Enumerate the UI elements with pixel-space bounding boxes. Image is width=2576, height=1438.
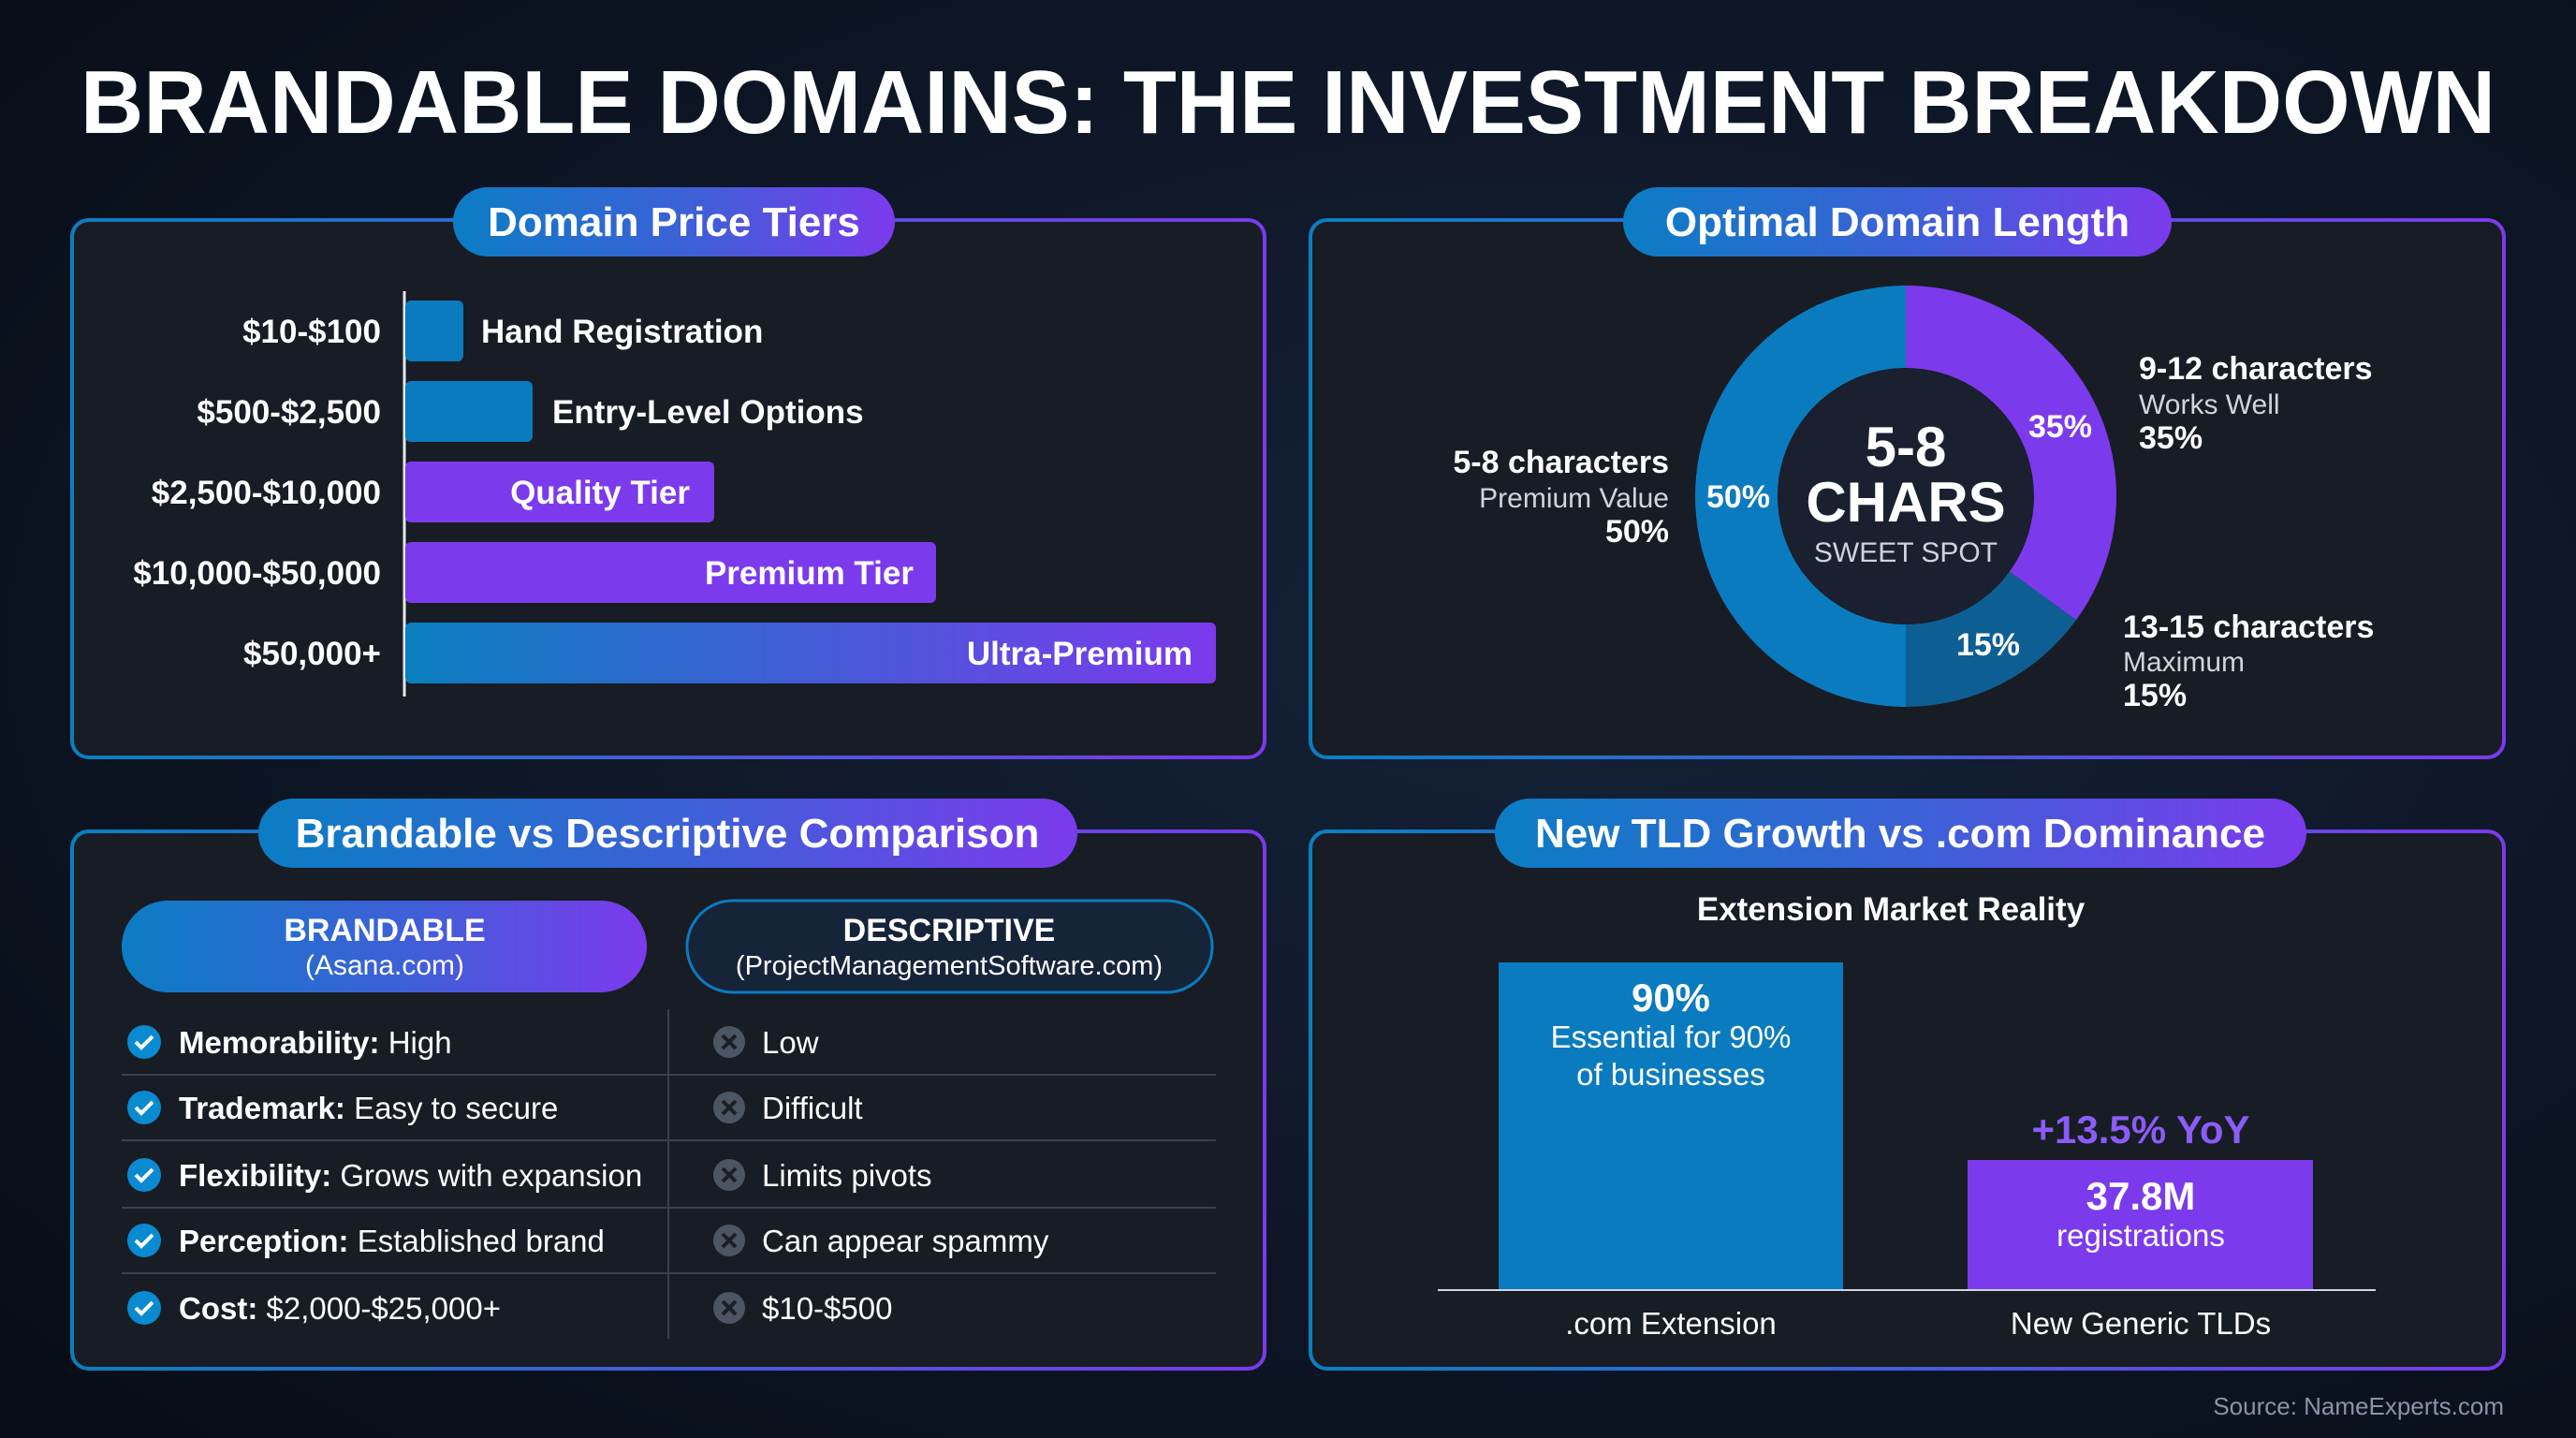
- brandable rows: Cost: $2,000-$25,000+: [179, 1291, 501, 1326]
- donut chart: SWEET SPOT: [1814, 537, 1998, 568]
- descriptive rows: $10-$500: [762, 1291, 892, 1326]
- donut chart: CHARS: [1806, 471, 2006, 534]
- heading: Domain Price Tiers: Domain Price Tiers: [488, 199, 860, 245]
- brandable rows: Perception: Established brand: [179, 1224, 605, 1258]
- chart subtitle: Extension Market Reality: [1697, 891, 2086, 928]
- legend: 13-15 characters: 15%: [2123, 678, 2187, 713]
- donut chart: [1695, 286, 2116, 707]
- axis labels: [1565, 1306, 2271, 1341]
- source: Source: NameExperts.com: [2213, 1392, 2504, 1420]
- bar chart: price tiers: Premium Tier: [705, 555, 914, 592]
- bar chart: price tiers: Ultra-Premium: [967, 636, 1193, 672]
- legend: 9-12 characters: 35%: [2139, 420, 2203, 456]
- bar: new gTLDs: [1968, 1160, 2313, 1290]
- heading: comparison: Brandable vs Descriptive Comparison: [296, 811, 1039, 857]
- axis labels: .com Extension: [1565, 1306, 1777, 1341]
- legend: 5-8 characters: [1453, 445, 1669, 550]
- brandable rows: [127, 1025, 642, 1326]
- legend: 5-8 characters: Premium Value: [1479, 483, 1669, 514]
- bar chart: price tiers: $10,000-$50,000: [133, 555, 381, 592]
- bar chart: price tiers: Entry-Level Options: [552, 394, 864, 431]
- column header: descriptive: [687, 901, 1212, 992]
- growth callout: +13.5% YoY: [2031, 1108, 2250, 1152]
- heading: Optimal Domain Length: [1623, 187, 2172, 257]
- descriptive rows: Can appear spammy: [762, 1224, 1049, 1258]
- heading: Optimal Domain Length: Optimal Domain Length: [1665, 199, 2130, 245]
- brandable rows: Trademark: Easy to secure: [179, 1091, 558, 1125]
- bar chart: price tiers: [133, 301, 1216, 683]
- heading: comparison: [258, 799, 1077, 868]
- column header: brandable: (Asana.com): [305, 950, 464, 981]
- heading: TLD growth: [1495, 799, 2306, 868]
- descriptive rows: Low: [762, 1025, 819, 1060]
- legend: 5-8 characters: 5-8 characters: [1453, 445, 1669, 480]
- panel: brandable vs descriptive: [72, 799, 1265, 1369]
- bar: .com: [1499, 962, 1843, 1290]
- legend: 13-15 characters: [2123, 609, 2374, 713]
- brandable rows: Flexibility: Grows with expansion: [179, 1158, 642, 1193]
- bar chart: price tiers: $10-$100: [242, 314, 381, 350]
- title: BRANDABLE DOMAINS: THE INVESTMENT BREAKDOWN: [80, 52, 2496, 153]
- axis labels: New Generic TLDs: [2011, 1306, 2271, 1341]
- brandable rows: Memorability: High: [179, 1025, 452, 1060]
- bar chart: price tiers: $50,000+: [243, 636, 381, 672]
- bar: .com: 90%: [1632, 976, 1710, 1020]
- heading: TLD growth: New TLD Growth vs .com Dominance: [1535, 811, 2265, 857]
- legend: 9-12 characters: 9-12 characters: [2139, 351, 2373, 387]
- heading: Domain Price Tiers: [453, 187, 895, 257]
- donut chart: 5-8: [1866, 416, 1946, 478]
- descriptive rows: [713, 1025, 1049, 1326]
- column header: brandable: BRANDABLE: [284, 913, 486, 948]
- descriptive rows: Difficult: [762, 1091, 863, 1125]
- bar: new gTLDs: 37.8M: [2086, 1174, 2195, 1218]
- bar chart: price tiers: $500-$2,500: [197, 394, 381, 431]
- legend: 5-8 characters: 50%: [1605, 514, 1669, 550]
- column header: descriptive: DESCRIPTIVE: [843, 913, 1055, 948]
- legend: 9-12 characters: [2139, 351, 2373, 456]
- descriptive rows: Limits pivots: [762, 1158, 932, 1193]
- bar chart: price tiers: Hand Registration: [481, 314, 763, 350]
- panel: domain price tiers: [72, 187, 1265, 757]
- bar chart: price tiers: $2,500-$10,000: [152, 475, 381, 511]
- donut chart: 15%: [1956, 627, 2020, 663]
- donut chart: 35%: [2028, 409, 2092, 445]
- donut chart: 50%: [1706, 479, 1770, 515]
- legend: 13-15 characters: 13-15 characters: [2123, 609, 2374, 645]
- bar: .com: Essential for 90%: [1551, 1020, 1791, 1054]
- bar chart: price tiers: Quality Tier: [510, 475, 690, 511]
- column header: brandable: [122, 901, 647, 992]
- bar: new gTLDs: registrations: [2056, 1218, 2225, 1253]
- panel: optimal domain length: [1310, 187, 2504, 757]
- legend: 9-12 characters: Works Well: [2139, 389, 2280, 420]
- column header: descriptive: (ProjectManagementSoftware.com): [736, 951, 1163, 981]
- panel: TLD growth: [1310, 799, 2504, 1369]
- legend: 13-15 characters: Maximum: [2123, 647, 2245, 678]
- bar: .com: of businesses: [1576, 1057, 1765, 1092]
